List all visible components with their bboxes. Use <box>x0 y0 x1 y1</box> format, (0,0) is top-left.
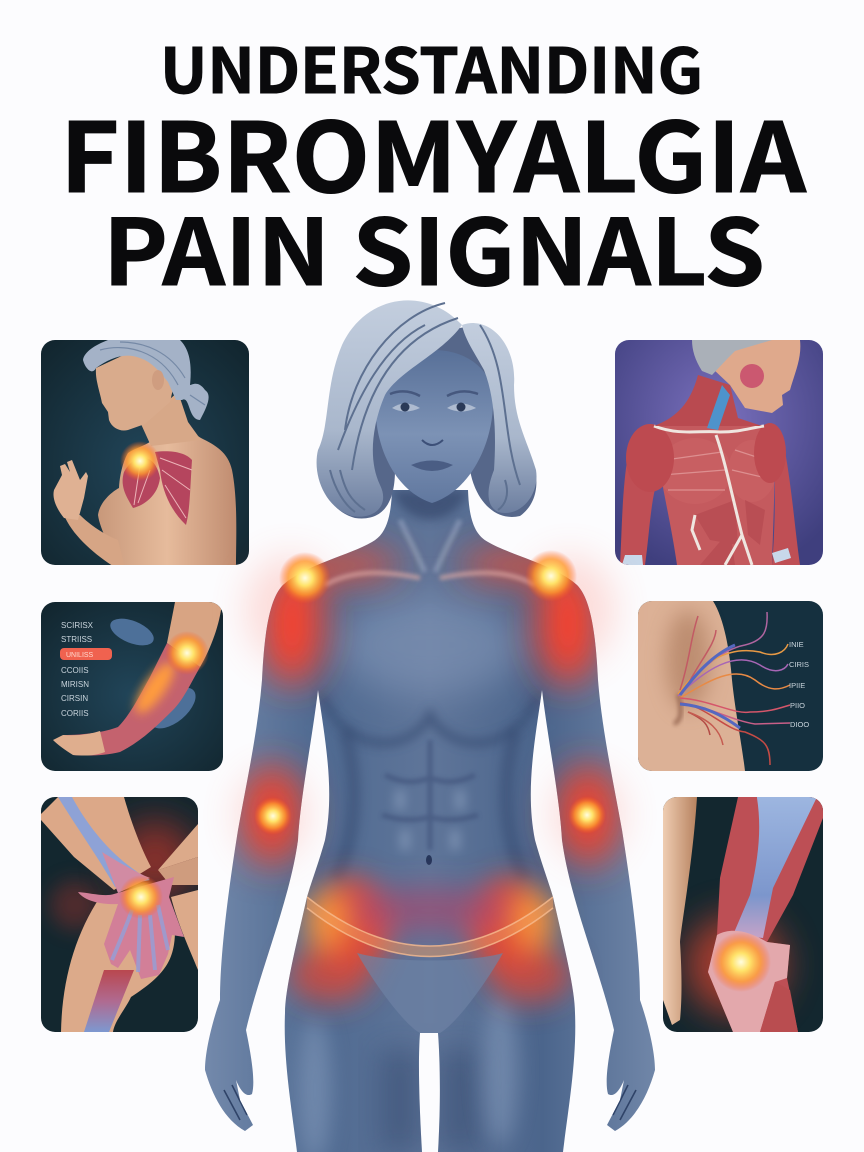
nerve labels: DIOO <box>790 720 809 729</box>
thigh shading <box>400 1050 460 1152</box>
chest shadows <box>322 695 538 743</box>
pain point: left shoulder <box>279 552 331 604</box>
nose <box>422 408 443 445</box>
arm <box>663 797 697 1025</box>
hair strands <box>100 342 205 405</box>
left shoulder muscle <box>626 424 674 492</box>
neck <box>142 396 199 446</box>
title <box>60 21 806 312</box>
underwear front <box>357 953 503 1033</box>
body shadow <box>666 610 710 710</box>
symptom labels: CORIIS <box>61 709 89 718</box>
pain point: left elbow <box>254 797 292 835</box>
face <box>375 350 493 503</box>
outer pain halo <box>236 555 624 859</box>
pain glow <box>119 875 163 919</box>
blue tendon <box>733 797 817 938</box>
eyes <box>390 391 478 412</box>
pain glow <box>165 631 209 675</box>
red glow <box>685 915 785 1015</box>
highlighted label: UNILISS <box>66 652 94 659</box>
neck shadow <box>392 490 468 520</box>
finger separations <box>224 1085 636 1120</box>
pain glow: shoulders and arms <box>238 549 622 865</box>
panel: knee pain <box>663 797 823 1032</box>
hand <box>78 877 184 979</box>
chest plane highlight <box>335 595 525 695</box>
panel: shoulder pain <box>41 340 249 568</box>
forearm muscle <box>63 643 200 756</box>
mouth <box>411 460 453 471</box>
fibres <box>668 450 760 491</box>
nerve labels: CIRIS <box>789 660 809 669</box>
raised hand <box>53 460 88 520</box>
abdominal shading <box>382 740 478 850</box>
navel <box>426 855 432 865</box>
back muscle <box>155 451 192 525</box>
nerve labels <box>789 640 809 729</box>
symptom labels <box>61 621 94 718</box>
symptom labels: SCIRISX <box>61 621 94 630</box>
spine <box>707 385 730 430</box>
abdominal muscles <box>695 500 765 565</box>
right shoulder muscle <box>754 423 786 483</box>
right limbs <box>158 824 198 970</box>
skin <box>638 601 745 771</box>
back hair <box>322 325 536 518</box>
muscle shading <box>224 490 636 1152</box>
back and shoulder <box>98 436 236 565</box>
fascia lines <box>654 426 764 565</box>
facial inflammation <box>740 364 764 388</box>
ear <box>152 370 164 390</box>
forearm <box>65 515 118 565</box>
highlighted label <box>60 648 112 660</box>
central figure <box>205 300 655 1152</box>
lower leg <box>61 895 175 1032</box>
symptom labels: STRIISS <box>61 635 92 644</box>
hand <box>53 731 105 756</box>
head <box>96 352 175 431</box>
symptom labels: CIRSIN <box>61 694 88 703</box>
pain glow <box>711 932 771 992</box>
nerve labels: PIIO <box>790 701 805 710</box>
collarbones <box>325 573 535 585</box>
pain glow: hips <box>288 877 572 1003</box>
waistband <box>307 897 553 956</box>
symptom labels: MIRISN <box>61 680 89 689</box>
pain glow <box>120 441 160 481</box>
inflamed muscle <box>130 658 180 718</box>
shoulder muscle <box>123 458 160 508</box>
upper arm <box>167 602 222 667</box>
nerve labels: IPIIE <box>789 681 805 690</box>
abdominal highlights <box>400 790 460 850</box>
neck muscles <box>654 375 762 426</box>
front hair left <box>317 300 462 517</box>
pink tendon end <box>102 852 150 893</box>
symptom labels: CCOIIS <box>61 666 89 675</box>
hair <box>692 340 772 375</box>
nerve cluster top <box>110 618 154 646</box>
panel: forearm pain <box>41 602 223 771</box>
upper arm <box>41 797 151 890</box>
finger tendons <box>112 905 168 972</box>
torso <box>658 426 775 565</box>
head <box>712 340 800 413</box>
thigh highlights <box>299 1015 331 1152</box>
thigh muscles <box>708 797 823 1032</box>
tendon to knee <box>84 970 134 1032</box>
left pectoral <box>659 438 731 504</box>
nerve cluster bottom <box>155 688 196 728</box>
front hair right <box>462 323 537 513</box>
hair <box>83 340 209 420</box>
blue upper tendon <box>58 797 150 887</box>
panel: neck and upper body muscles <box>615 340 823 565</box>
body <box>205 490 655 1152</box>
armpit crease <box>674 694 681 724</box>
pain point: right shoulder <box>525 550 577 602</box>
title line: Fibromyalgia: FIBROMYALGIA <box>60 81 806 220</box>
wrist wraps <box>622 548 791 565</box>
arms <box>620 455 800 565</box>
side torso shadows <box>335 730 525 880</box>
head <box>317 300 537 518</box>
title line: Pain Signals: PAIN SIGNALS <box>103 180 765 312</box>
knee fascia <box>708 931 790 1032</box>
muscle fibres <box>134 458 192 518</box>
nerve lines <box>678 612 790 765</box>
nerve labels: INIE <box>789 640 804 649</box>
lower leg muscle <box>760 982 798 1032</box>
panel: nerve signals <box>638 601 823 771</box>
red glow <box>115 820 195 900</box>
title line: Understanding: UNDERSTANDING <box>160 21 703 111</box>
right pectoral <box>728 440 776 502</box>
panel: hand and wrist <box>41 797 198 1032</box>
pain point: right elbow <box>568 796 606 834</box>
neck tendons <box>400 520 460 572</box>
hair strands <box>330 303 520 512</box>
